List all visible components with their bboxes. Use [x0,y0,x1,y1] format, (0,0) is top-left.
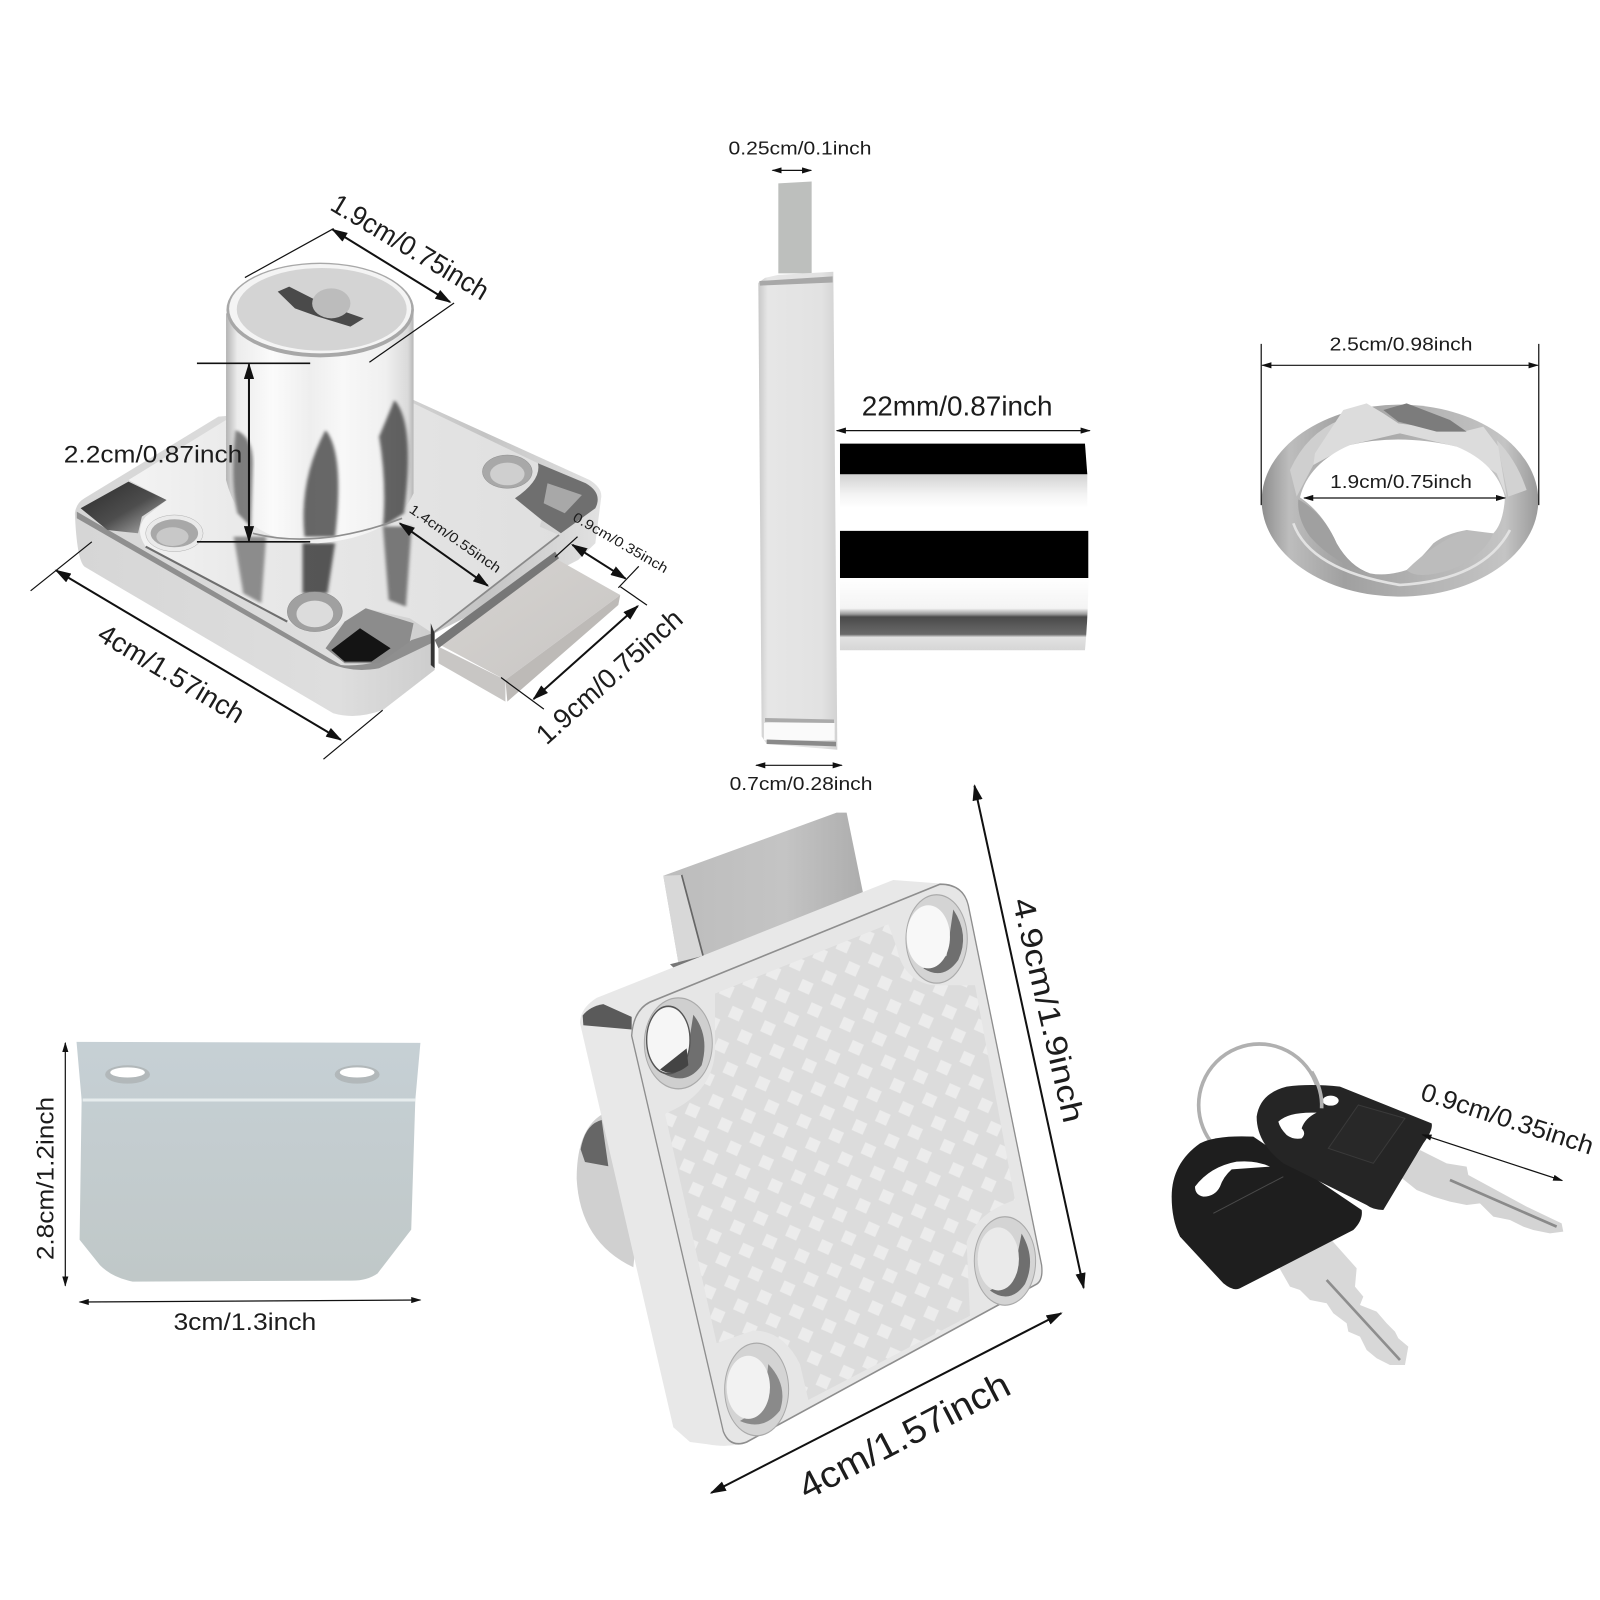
mounting hole left [105,1065,150,1084]
dimension: plate height: 4.9cm/1.9inch [1006,895,1090,1126]
bracket plate [77,1042,420,1282]
plate body [580,880,1042,1446]
bolt post [778,181,812,273]
screw left [146,515,203,552]
dimension: plate thickness: 0.7cm/0.28inch [730,773,872,794]
dimension: post width: 0.25cm/0.1inch [729,137,871,158]
panel: bracket with dimensions [32,1042,420,1336]
panel: escutcheon ring with dimensions [1261,333,1539,597]
corner recess right [515,463,598,533]
panel: lock front view with dimensions [577,786,1090,1508]
dimension: cylinder diameter [245,188,495,362]
dimension: bolt projection: 0.9cm/0.35inch [570,510,671,576]
screw hole top-left [644,998,712,1089]
screw bottom [287,592,342,632]
dimension: outer diameter [1261,333,1539,505]
dimension: outer diameter: 2.5cm/0.98inch [1330,333,1472,354]
mounting hole right [335,1065,380,1084]
dimension: inner diameter: 1.9cm/0.75inch [1330,471,1472,492]
dimension: bracket height: 2.8cm/1.2inch [32,1097,59,1260]
dimension: offset: 1.4cm/0.55inch [406,502,504,576]
dimension: body width [31,542,383,759]
screw hole top-right [906,895,967,983]
cylinder [226,263,414,543]
side view part [758,181,1088,750]
textured panel [665,924,1015,1400]
lower key [1172,1136,1408,1365]
panel: lock perspective view with dimensions [31,188,689,759]
screw hole bottom-left [725,1343,789,1436]
dimension: body width: 4cm/1.57inch [93,618,250,729]
screw hole bottom-right [974,1217,1036,1305]
panel: keys with dimensions [1172,1044,1597,1365]
upper key [1257,1072,1563,1233]
panel: lock side view with dimensions [729,137,1090,794]
rear cylinder [577,1114,647,1267]
screw right [482,455,532,488]
key slot [278,287,364,327]
dimension: plate width: 4cm/1.57inch [791,1364,1017,1508]
keys part [1172,1044,1563,1365]
dimension: bolt projection [555,510,671,588]
lock top plate [128,403,559,633]
corner recess left [81,482,167,533]
dimension: key width: 0.9cm/0.35inch [1417,1078,1597,1160]
cylinder reflection [234,527,412,607]
sliding bolt [431,552,620,702]
corner recess bottom [326,608,414,663]
dimension: plate width [711,1313,1061,1508]
dimension: plate height [974,786,1090,1288]
key ring [1199,1044,1320,1166]
dimension: bolt width: 1.9cm/0.75inch [530,603,689,750]
dimension: cylinder length: 22mm/0.87inch [862,391,1053,422]
front bolt [663,813,866,973]
mounting plate [758,272,837,750]
lock body [75,400,601,716]
ring [1262,403,1538,597]
cylinder cap [226,263,414,357]
front view part [577,813,1042,1446]
dimension: bracket width: 3cm/1.3inch [173,1309,316,1336]
dimension: cylinder diameter: 1.9cm/0.75inch [326,188,495,306]
dimension: cylinder height [64,363,310,542]
dimension: offset [400,502,504,586]
dimension: cylinder height: 2.2cm/0.87inch [64,442,242,469]
side cylinder [840,442,1088,650]
